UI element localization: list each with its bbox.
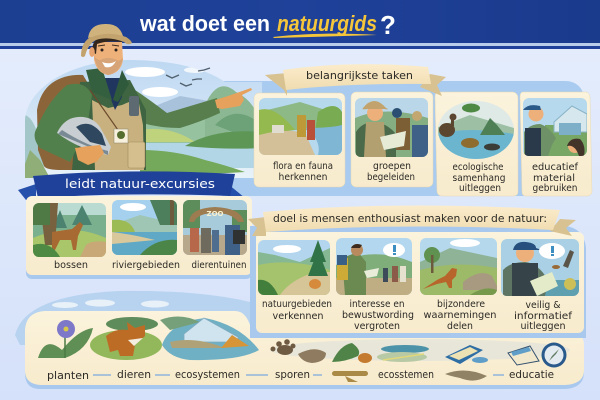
card: educatief material gebruiken: gebruiken	[532, 183, 578, 194]
panel: excursion locations: dierentuinen	[192, 260, 246, 271]
icon: paw and track	[270, 339, 326, 363]
panel: goal	[250, 226, 586, 338]
panel: goal: natuurgebieden	[262, 299, 332, 310]
panel: goal: interesse en	[350, 299, 404, 310]
sky backdrop	[15, 291, 250, 345]
card: flora en fauna herkennen	[254, 93, 345, 187]
scene: bijzondere waarnemingen delen	[420, 238, 497, 295]
card: ecologische samenhang uitleggen	[435, 92, 518, 196]
icon: branch	[332, 371, 368, 382]
hat	[88, 24, 124, 40]
card: flora en fauna herkennen: flora en fauna	[273, 161, 333, 172]
panel: bottom strip	[15, 291, 584, 389]
ribbon: doel: doel is mensen enthousiast maken voor de natuur:	[273, 212, 547, 225]
icon: book and compass	[508, 342, 566, 368]
collar and shirt	[103, 78, 122, 110]
ribbon: leidt natuur-excursies: leidt natuur-excursies	[65, 176, 215, 191]
icon: flower plant	[38, 320, 93, 358]
title: wat doet een	[139, 11, 270, 36]
panel: goal: verkennen	[272, 311, 324, 322]
head	[94, 42, 123, 75]
icon: fox	[90, 317, 162, 360]
ribbon: doel	[248, 205, 576, 236]
panel: goal: waarnemingen	[424, 310, 496, 321]
illustration: nature guide	[35, 24, 252, 170]
icon: fern and squirrel	[332, 343, 372, 363]
card: flora en fauna herkennen: herkennen	[278, 172, 328, 183]
scene: interesse en bewustwording vergroten	[336, 238, 412, 295]
card: educatief material gebruiken	[520, 92, 592, 196]
icon: marsh plants	[377, 345, 429, 362]
panel: goal: delen	[447, 321, 473, 332]
vest	[92, 98, 144, 170]
card: groepen begeleiden: groepen	[373, 161, 411, 172]
labels	[47, 368, 554, 382]
ribbon: belangrijkste taken: belangrijkste taken	[306, 69, 413, 82]
scene: river area	[112, 200, 177, 255]
labels: ecosystemen	[175, 368, 240, 381]
icon: greenhouse on water	[160, 316, 259, 360]
panel: goal: veilig &	[526, 300, 561, 311]
panel: goal: informatief	[514, 311, 573, 322]
panel: task cards	[254, 92, 592, 196]
card: educatief material gebruiken: material	[533, 173, 575, 184]
header band	[0, 0, 600, 49]
icon: birds	[166, 68, 210, 86]
panel: blue backdrop tasks	[222, 81, 585, 196]
panel: goal: vergroten	[354, 321, 400, 332]
labels: planten	[47, 369, 89, 382]
ribbon: belangrijkste taken	[265, 64, 446, 96]
title	[139, 10, 396, 40]
card: educatief material gebruiken: educatief	[532, 162, 578, 173]
backpack	[37, 75, 92, 170]
scene: forest with deer	[33, 203, 106, 257]
panel: goal: uitleggen	[520, 321, 566, 332]
labels: sporen	[275, 368, 310, 381]
card: ecologische samenhang uitleggen: ecologische	[452, 162, 504, 173]
panel: goal: bewustwording	[342, 310, 414, 321]
panel: excursion locations: riviergebieden	[112, 260, 180, 271]
card: ecologische samenhang uitleggen: samenhang	[452, 173, 506, 184]
hand	[215, 88, 252, 109]
labels: educatie	[509, 368, 554, 381]
panel: goal: bijzondere	[437, 299, 485, 310]
scene: veilig en informatief uitleggen	[501, 239, 579, 296]
ribbon: leidt natuur-excursies	[18, 171, 245, 204]
scene: zoo	[183, 200, 247, 255]
labels: ecosstemen	[378, 368, 434, 381]
icon: feather	[445, 370, 487, 381]
card: groepen begeleiden	[351, 92, 433, 187]
card: ecologische samenhang uitleggen: uitleggen	[459, 183, 501, 194]
card: groepen begeleiden: begeleiden	[367, 172, 415, 183]
hand on helmet	[75, 145, 104, 165]
title: natuurgids	[277, 11, 377, 36]
icon: tablet	[445, 345, 488, 364]
scene: natuurgebieden verkennen	[258, 240, 330, 295]
scene: zoo: ZOO	[207, 210, 224, 218]
torso	[72, 80, 146, 170]
panel: excursion locations: bossen	[54, 260, 88, 271]
panel: excursion locations	[26, 196, 252, 279]
helmet	[57, 117, 111, 155]
title: ?	[380, 10, 396, 40]
pointing arm	[135, 90, 220, 128]
hero landscape	[20, 55, 265, 180]
left arm	[35, 84, 92, 162]
labels: dieren	[117, 368, 151, 381]
